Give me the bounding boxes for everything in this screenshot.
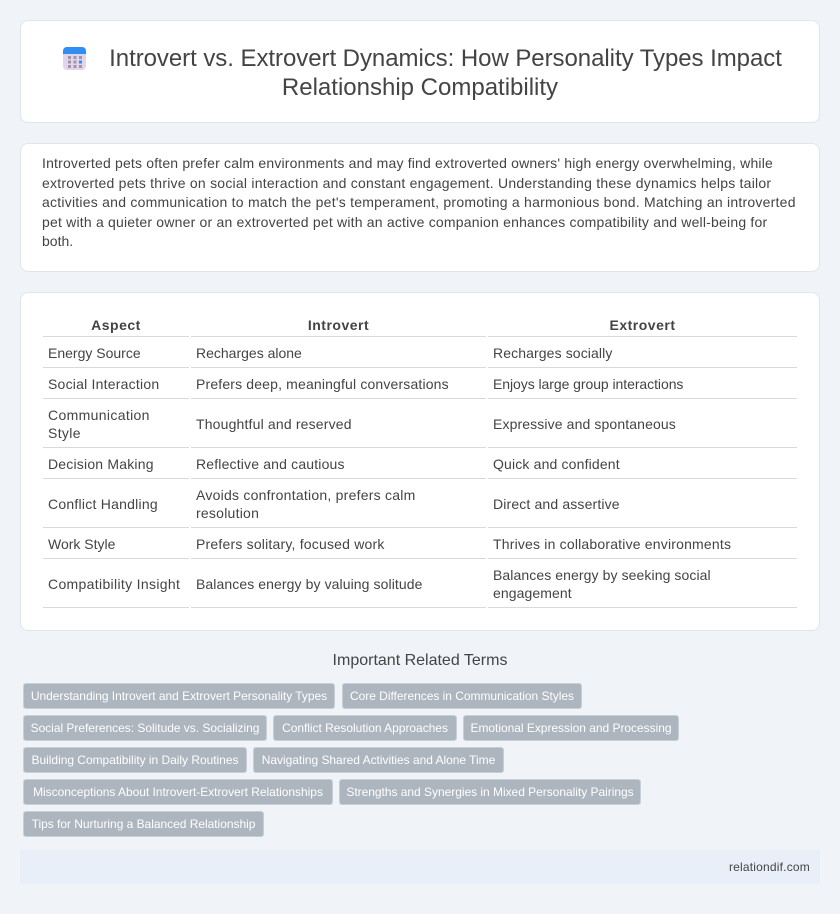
icon: calendar [63,47,86,70]
text block: introduction: activities and communication to match the pet's temperament, promoting a harmonious bond. Matching an introverted [42,194,796,210]
table header: Aspect [91,317,141,333]
tag: Emotional Expression and Processing [470,721,672,735]
text block: introduction [42,155,796,249]
row: energy source: Recharges socially [493,345,612,361]
title [109,45,782,101]
row: work style [48,536,731,552]
row: decision making: Quick and confident [493,456,620,472]
row: communication style: Communication [48,407,150,423]
row: compatibility insight: Compatibility Insight [48,576,180,592]
row: energy source: Energy Source [48,345,141,361]
row: conflict handling: Direct and assertive [493,496,620,512]
row: energy source [48,345,612,361]
text block: introduction: pet with a quieter owner or an extroverted pet with an active companion enhances compatibility and well-being for [42,214,767,230]
text block: introduction: Introverted pets often prefer calm environments and may find extroverted owners' high energy overwhelming, while [42,155,773,171]
tag: Tips for Nurturing a Balanced Relationship [32,817,255,831]
tag: Strengths and Synergies in Mixed Personality Pairings [346,785,634,799]
row: conflict handling [48,487,620,521]
title: Introvert vs. Extrovert Dynamics: How Personality Types Impact [109,45,782,72]
row: work style: Work Style [48,536,115,552]
footer: site name: relationdif.com [729,860,810,874]
tag [253,747,504,773]
tag [23,747,247,773]
tag [273,715,457,741]
text block: introduction: both. [42,233,73,249]
footer [20,850,820,884]
tag list [23,683,679,837]
tag [23,779,333,805]
row: communication style: Style [48,425,81,441]
row: compatibility insight [48,567,711,601]
tag: Building Compatibility in Daily Routines [32,753,238,767]
row: decision making: Reflective and cautious [196,456,345,472]
row: communication style [48,407,676,441]
row: social interaction: Prefers deep, meaningful conversations [196,376,449,392]
table header [91,317,675,333]
tag [23,683,335,709]
row: communication style: Expressive and spontaneous [493,416,676,432]
panel: introduction [20,143,820,272]
tag [23,811,264,837]
title: Relationship Compatibility [282,74,558,101]
row: work style: Prefers solitary, focused work [196,536,385,552]
row: energy source: Recharges alone [196,345,302,361]
row: communication style: Thoughtful and reserved [196,416,352,432]
tag [342,683,582,709]
row: social interaction [48,376,683,392]
tag: Social Preferences: Solitude vs. Socializing [31,721,259,735]
row: conflict handling: Conflict Handling [48,496,158,512]
heading: related terms: Important Related Terms [333,652,507,669]
row: decision making: Decision Making [48,456,154,472]
tag [339,779,641,805]
tag: Understanding Introvert and Extrovert Personality Types [31,689,327,703]
tag: Conflict Resolution Approaches [282,721,448,735]
row: work style: Thrives in collaborative environments [493,536,731,552]
row: social interaction: Enjoys large group interactions [493,376,683,392]
row: decision making [48,456,620,472]
tag: Misconceptions About Introvert-Extrovert Relationships [33,785,323,799]
tag [23,715,267,741]
row: conflict handling: Avoids confrontation, prefers calm [196,487,416,503]
panel: comparison table [20,292,820,631]
tag [463,715,679,741]
text block: introduction: extroverted pets thrive on social interaction and constant engagement. Understanding these dynamics helps tailor [42,174,771,190]
row: social interaction: Social Interaction [48,376,159,392]
table header: Introvert [308,317,369,333]
tag: Navigating Shared Activities and Alone Time [262,753,495,767]
panel: header [20,20,820,123]
row: compatibility insight: engagement [493,585,572,601]
row: conflict handling: resolution [196,505,259,521]
row: compatibility insight: Balances energy by valuing solitude [196,576,423,592]
table header: Extrovert [610,317,675,333]
tag: Core Differences in Communication Styles [350,689,574,703]
row: compatibility insight: Balances energy by seeking social [493,567,711,583]
